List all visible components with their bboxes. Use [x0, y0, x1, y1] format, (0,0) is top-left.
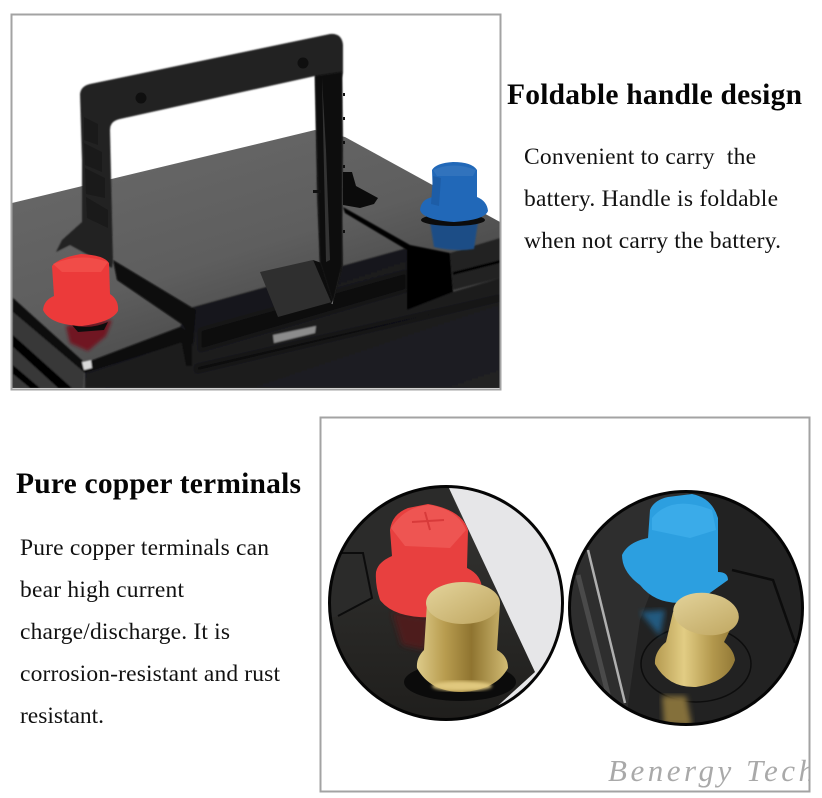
- icon: red terminal cap: [43, 254, 118, 351]
- text block: pure copper description: bear high current: [20, 577, 184, 603]
- photo: red cap with brass positive terminal: [328, 485, 564, 722]
- text block: foldable handle description: when not carry the battery.: [524, 228, 781, 254]
- text block: foldable handle description: [524, 144, 781, 254]
- icon: blue terminal cap: [420, 162, 488, 250]
- text block: foldable handle description: Convenient to carry the: [524, 144, 756, 170]
- text block: foldable handle description: battery. Handle is foldable: [524, 186, 778, 212]
- folding flap: [260, 260, 332, 317]
- panel: foldable handle battery photo: [12, 14, 500, 390]
- battery lid top surface: [12, 130, 500, 388]
- brass post: [417, 603, 508, 692]
- heading: pure copper terminals: Pure copper terminals: [16, 468, 301, 500]
- text block: pure copper description: [20, 535, 280, 729]
- text block: pure copper description: corrosion-resistant and rust: [20, 661, 280, 687]
- heading: foldable handle design: Foldable handle design: [507, 79, 802, 111]
- watermark: Benergy Tech: [608, 753, 814, 788]
- latch hinge: [343, 172, 378, 208]
- brass ring: [404, 670, 516, 701]
- text block: pure copper description: resistant.: [20, 703, 104, 729]
- handle: [56, 34, 343, 303]
- text block: pure copper description: Pure copper terminals can: [20, 535, 269, 561]
- photo: blue cap with brass negative terminal: [568, 490, 804, 726]
- text block: pure copper description: charge/discharge. It is: [20, 619, 230, 645]
- handle ribs: [313, 93, 345, 233]
- battery body and edges: [12, 207, 500, 388]
- red cap: [376, 504, 482, 617]
- blue cap: [622, 494, 728, 603]
- panel: copper terminals photo frame: [320, 418, 810, 792]
- brass post: [655, 612, 738, 687]
